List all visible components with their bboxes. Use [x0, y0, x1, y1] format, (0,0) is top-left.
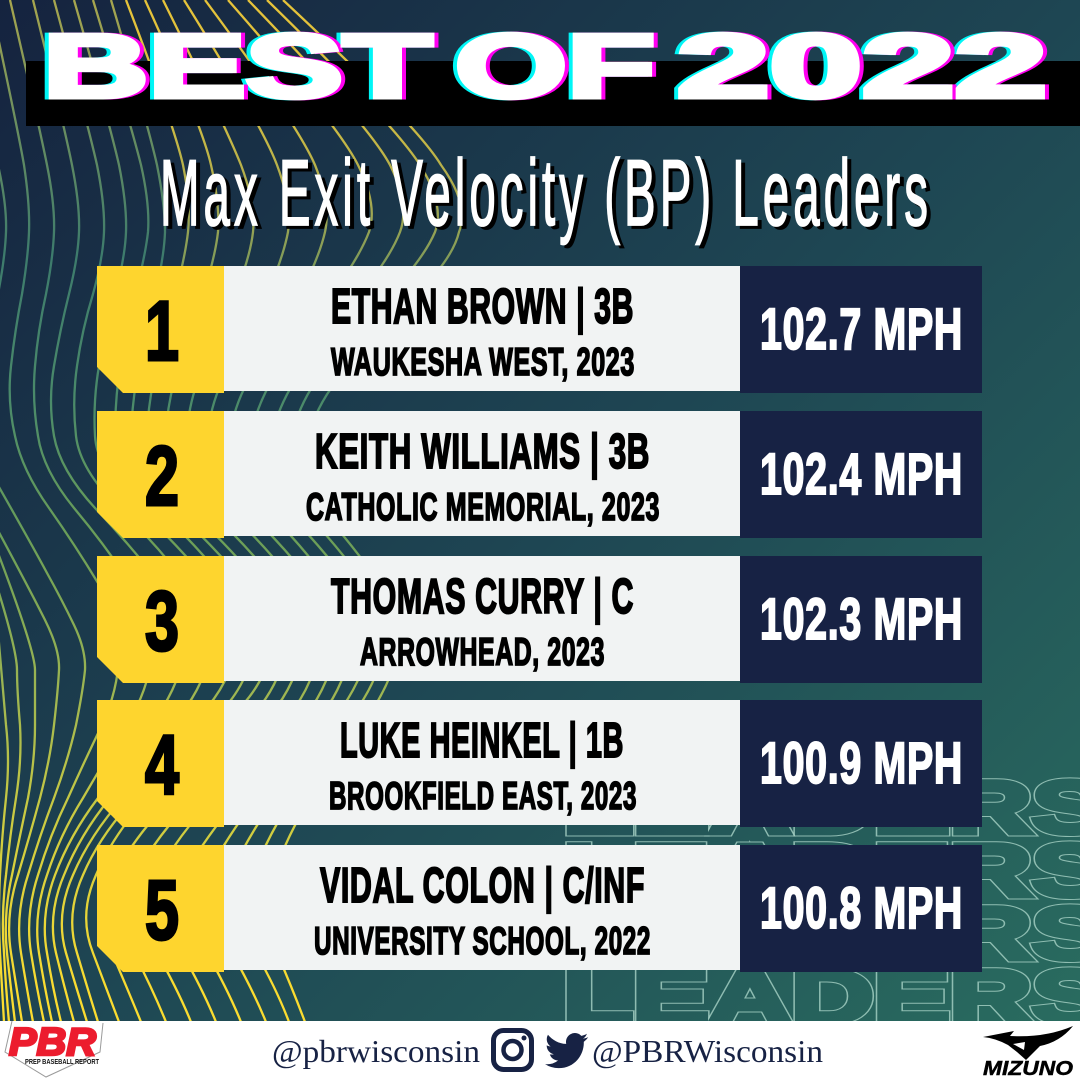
ghost outlined LEADERS text: LEADERS	[563, 955, 1080, 1038]
velocity 5: 100.8 MPH	[760, 876, 963, 941]
icon: instagram	[494, 1030, 532, 1070]
rank badge 4: 4	[145, 718, 179, 812]
player info 1: WAUKESHA WEST, 2023	[331, 341, 635, 384]
ghost outlined LEADERS text	[563, 766, 1080, 1038]
ghost outlined LEADERS text: LEADERS	[563, 829, 1080, 912]
player info 5: UNIVERSITY SCHOOL, 2022	[314, 920, 651, 963]
player info 4: BROOKFIELD EAST, 2023	[329, 775, 637, 818]
rank badge 3	[97, 556, 224, 683]
player info 2	[224, 411, 740, 536]
player info 4	[224, 700, 740, 825]
player info 3	[224, 556, 740, 681]
panel: rank 1 row	[97, 266, 982, 393]
twitter handle: @PBRWisconsin	[592, 1033, 823, 1069]
player info 5	[224, 845, 740, 970]
player info 3: THOMAS CURRY | C	[331, 570, 634, 624]
velocity 5	[740, 845, 982, 972]
wavy contour lines	[0, 0, 462, 1022]
title: BEST OF 2022: OF	[459, 17, 659, 117]
title: BEST OF 2022	[39, 17, 1051, 117]
ghost outlined LEADERS text: LEADERS	[563, 829, 1080, 912]
velocity 4: 100.9 MPH	[760, 731, 963, 796]
rank badge 2: 2	[145, 429, 179, 523]
ghost outlined LEADERS text: LEADERS	[563, 766, 1080, 849]
icon: twitter bird	[545, 1033, 588, 1068]
ghost outlined LEADERS text: LEADERS	[563, 766, 1080, 849]
title: BEST OF 2022: 2022	[673, 17, 1043, 117]
rank badge 5: 5	[145, 863, 179, 957]
title: BEST OF 2022: OF	[455, 17, 655, 117]
velocity 2: 102.4 MPH	[760, 442, 963, 507]
panel: rank 5 row	[97, 845, 982, 972]
ghost outlined LEADERS text: LEADERS	[563, 892, 1080, 975]
velocity 3	[740, 556, 982, 683]
rank badge 4	[97, 700, 224, 827]
title: BEST OF 2022: 2022	[677, 17, 1047, 117]
panel: rank 2 row	[97, 411, 982, 538]
title: BEST OF 2022: BEST	[43, 17, 432, 117]
panel: rank 3 row	[97, 556, 982, 683]
rank badge 5	[97, 845, 224, 972]
title: BEST OF 2022: BEST	[47, 17, 436, 117]
rank badge 1: 1	[145, 284, 179, 378]
title: BEST OF 2022: BEST	[39, 17, 428, 117]
PBR logo: PREP BASEBALL REPORT	[25, 1057, 99, 1066]
title bar	[26, 61, 1080, 126]
instagram handle: @pbrwisconsin	[272, 1033, 480, 1069]
player info 3: ARROWHEAD, 2023	[360, 631, 605, 674]
title: BEST OF 2022: OF	[451, 17, 651, 117]
rank badge 2	[97, 411, 224, 538]
PBR logo	[5, 1021, 103, 1077]
footer bar	[0, 1021, 1080, 1080]
velocity 4	[740, 700, 982, 827]
Mizuno logo: MIZUNO	[983, 1058, 1073, 1080]
velocity 2	[740, 411, 982, 538]
rank badge 1	[97, 266, 224, 393]
ghost outlined LEADERS text: LEADERS	[563, 892, 1080, 975]
Mizuno logo	[983, 1026, 1073, 1080]
velocity 1: 102.7 MPH	[760, 297, 963, 362]
velocity 1	[740, 266, 982, 393]
panel: rank 4 row	[97, 700, 982, 827]
title: BEST OF 2022: 2022	[681, 17, 1051, 117]
player info 2: CATHOLIC MEMORIAL, 2023	[306, 486, 660, 529]
ghost outlined LEADERS text: LEADERS	[563, 955, 1080, 1038]
velocity 3: 102.3 MPH	[760, 587, 963, 652]
rank badge 3: 3	[145, 574, 179, 668]
player info 1: ETHAN BROWN | 3B	[331, 280, 634, 334]
player info 2: KEITH WILLIAMS | 3B	[315, 425, 650, 479]
PBR logo: PBR	[9, 1021, 96, 1064]
player info 5: VIDAL COLON | C/INF	[320, 859, 645, 913]
player info 4: LUKE HEINKEL | 1B	[340, 714, 624, 768]
player info 1	[224, 266, 740, 391]
